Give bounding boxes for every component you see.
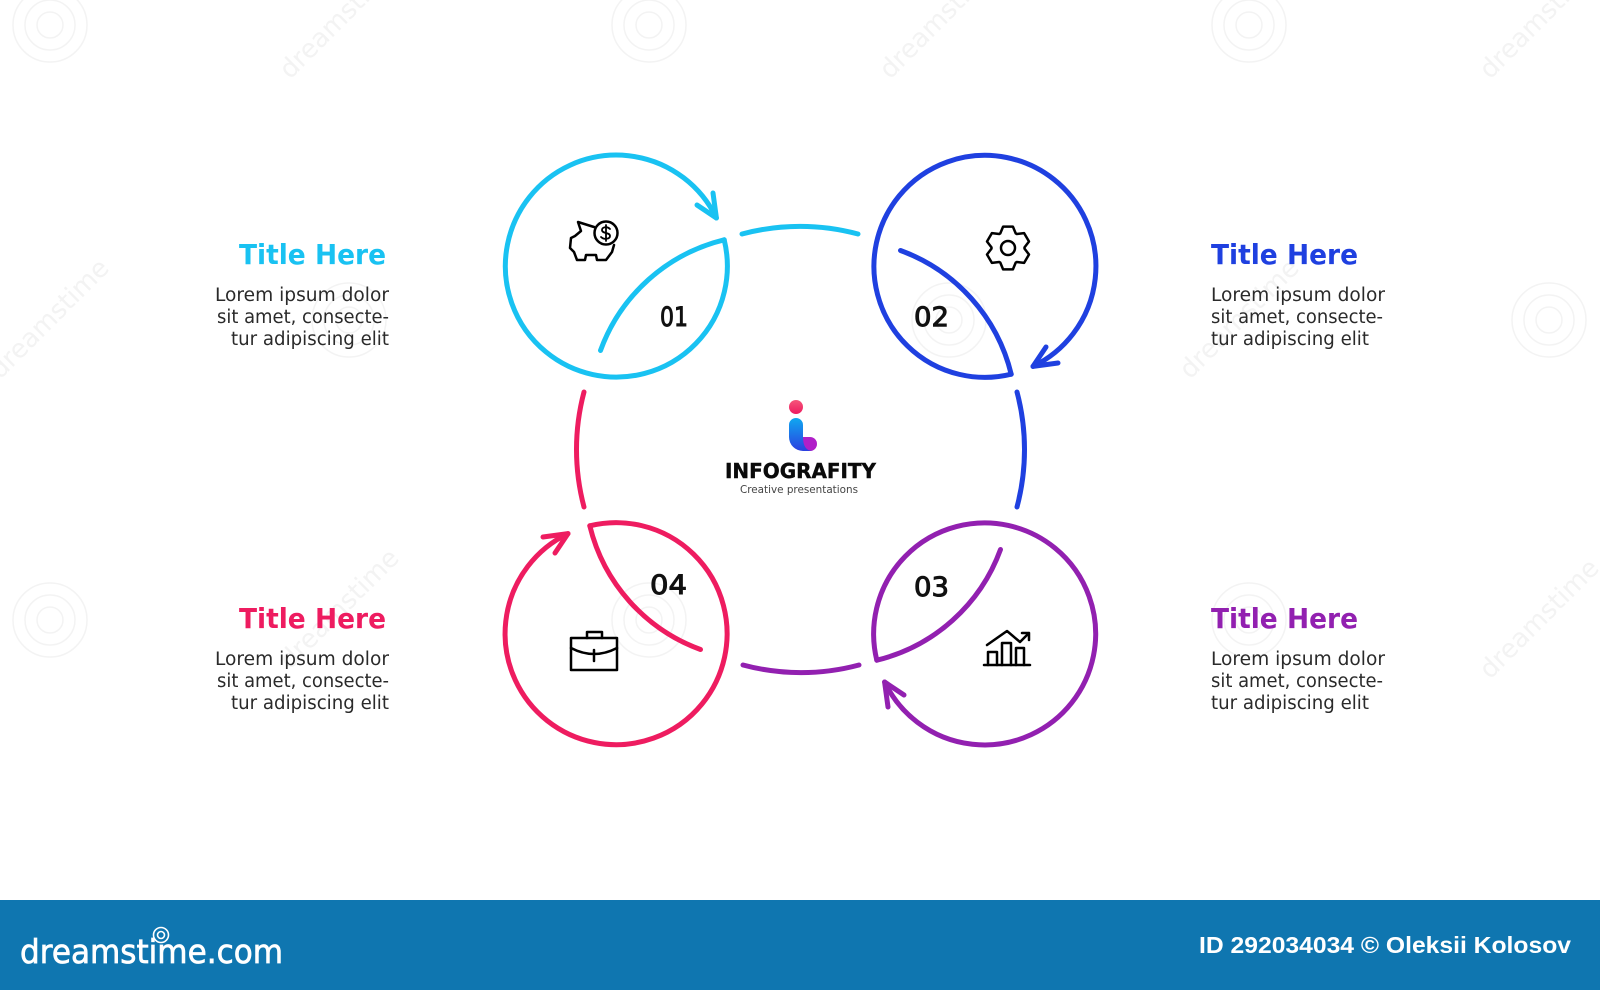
icon: briefcase — [571, 632, 617, 670]
number 01: 01 — [660, 302, 688, 333]
step 01 circle arrow — [505, 155, 727, 377]
step 04 circle arrow — [505, 523, 727, 745]
central ring arc: top — [742, 226, 858, 234]
text block: step 02: tur adipiscing elit — [1211, 329, 1369, 350]
text block: step 04: tur adipiscing elit — [231, 693, 389, 714]
text block: step 02: Lorem ipsum dolor — [1211, 285, 1385, 306]
footer band: dreamstime.com — [20, 932, 283, 971]
number 03: 03 — [914, 572, 949, 603]
central logo: INFOGRAFITY — [725, 459, 877, 483]
text block: step 03: Lorem ipsum dolor — [1211, 649, 1385, 670]
text block: step 04 — [215, 602, 389, 714]
text block: step 02: Title Here — [1211, 238, 1358, 271]
icon: piggy bank — [570, 222, 618, 260]
text block: step 02 — [1211, 238, 1385, 350]
text block: step 03: sit amet, consecte- — [1211, 671, 1383, 692]
text block: step 03 — [1211, 602, 1385, 714]
central logo — [725, 400, 877, 496]
step 03 circle arrow — [874, 523, 1096, 745]
footer band — [0, 900, 1600, 990]
icon: gear — [987, 227, 1029, 269]
text block: step 01: Lorem ipsum dolor — [215, 285, 389, 306]
number 04: 04 — [650, 570, 687, 601]
text block: step 03: tur adipiscing elit — [1211, 693, 1369, 714]
text block: step 04: Title Here — [239, 602, 386, 635]
central ring arc: left — [576, 392, 584, 507]
text block: step 04: sit amet, consecte- — [217, 671, 389, 692]
number 02: 02 — [914, 302, 949, 333]
central ring arc: bottom — [743, 665, 859, 673]
text block: step 01: tur adipiscing elit — [231, 329, 389, 350]
watermark pattern — [0, 0, 1600, 685]
central logo: Creative presentations — [740, 484, 858, 496]
text block: step 01: sit amet, consecte- — [217, 307, 389, 328]
step 02 circle arrow — [874, 155, 1096, 377]
watermark pattern: dreamstime — [1174, 253, 1305, 385]
footer band: ID 292034034 © Oleksii Kolosov — [1199, 932, 1571, 958]
text block: step 03: Title Here — [1211, 602, 1358, 635]
text block: step 01 — [215, 238, 389, 350]
watermark pattern: dreamstime — [274, 543, 405, 675]
text block: step 02: sit amet, consecte- — [1211, 307, 1383, 328]
text block: step 01: Title Here — [239, 238, 386, 271]
icon: growth chart — [984, 631, 1030, 665]
central ring arc: right — [1017, 392, 1025, 507]
text block: step 04: Lorem ipsum dolor — [215, 649, 389, 670]
